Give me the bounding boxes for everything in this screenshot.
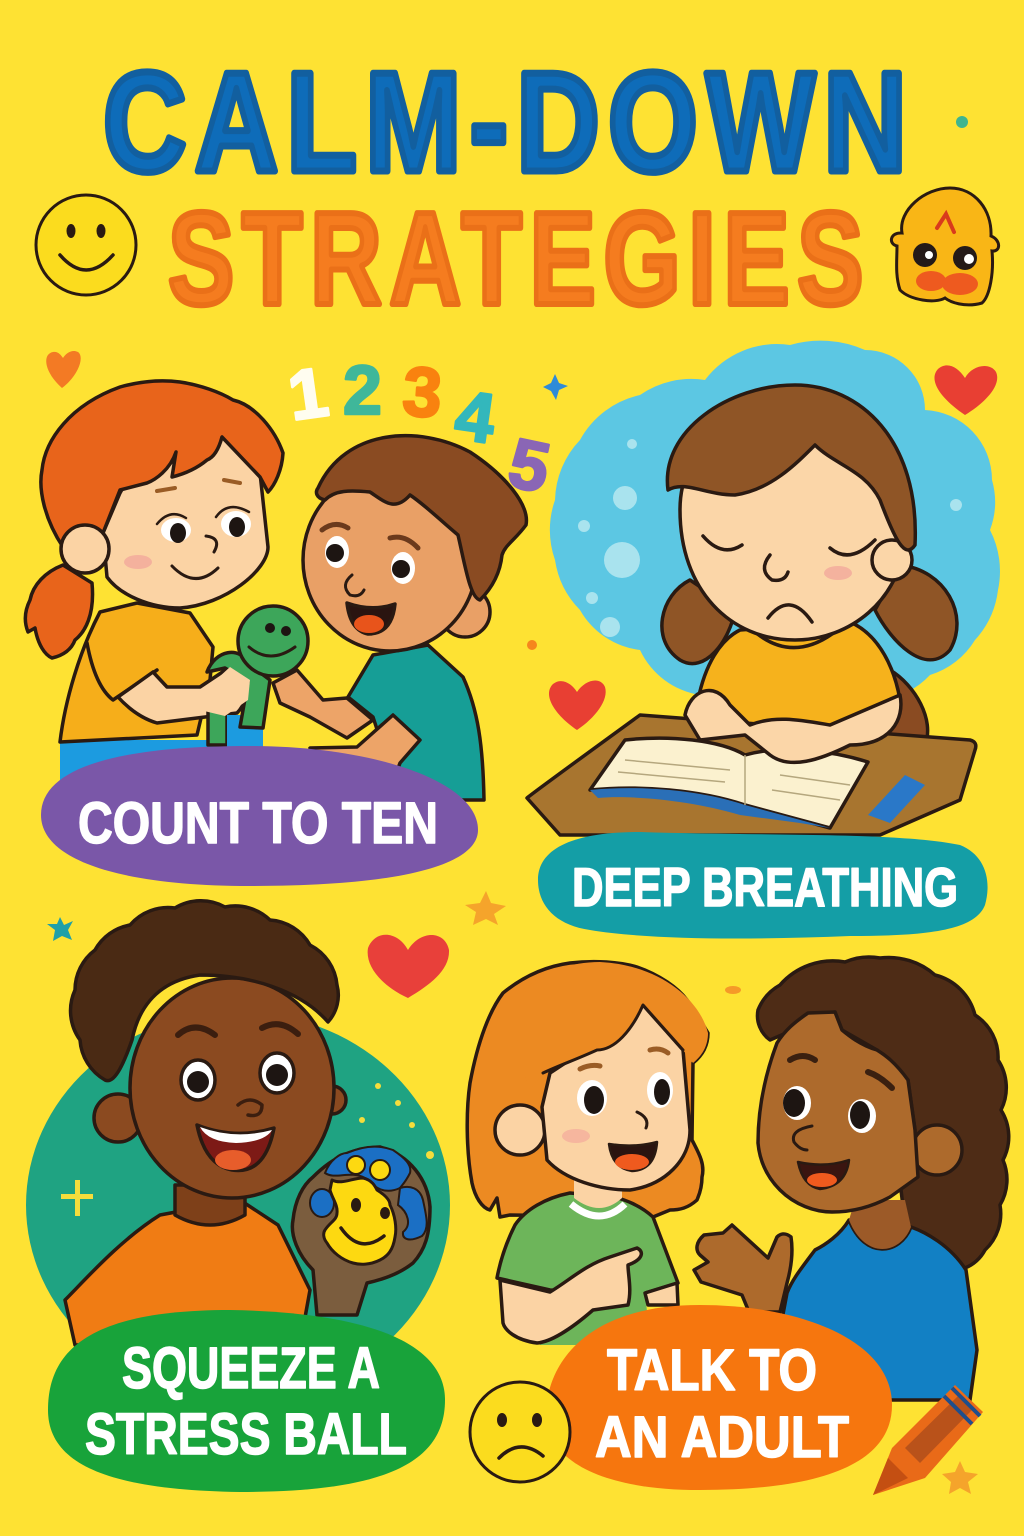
blue top [780, 1220, 977, 1400]
icon: heart middle [549, 681, 606, 730]
nose [637, 1112, 647, 1128]
icon: small orange star [942, 1461, 978, 1494]
icon: heart top right [934, 365, 997, 415]
shirt [65, 1200, 310, 1345]
right pigtail [875, 565, 957, 660]
shirt [60, 603, 213, 742]
eyelids [157, 507, 249, 524]
ear [912, 1125, 962, 1175]
green backdrop [26, 1012, 450, 1398]
head [303, 469, 477, 651]
open book [590, 738, 868, 828]
boy character [65, 901, 346, 1345]
icon: orange dash [725, 986, 741, 994]
eyes [577, 1080, 607, 1116]
number 4: 4 [450, 376, 500, 458]
label pill: talk to an adult [546, 1305, 892, 1490]
cheek [124, 555, 152, 569]
icon: blue sparkle [543, 374, 568, 400]
nose [345, 575, 364, 596]
label text line 2: AN ADULT [595, 1405, 849, 1470]
icon: heart top left [46, 351, 81, 388]
stress ball in hand [292, 1147, 430, 1315]
eyes [325, 536, 349, 568]
panel: squeeze a stress ball [26, 901, 450, 1492]
number 2: 2 [343, 351, 382, 429]
nose and smile [172, 536, 218, 579]
panel: deep breathing [527, 341, 1000, 938]
icon: sad face [470, 1382, 570, 1482]
nose [238, 1100, 262, 1116]
brows [157, 480, 240, 491]
ear [440, 587, 490, 637]
toy blue pants patch [227, 715, 263, 748]
cheek [562, 1129, 590, 1143]
collar [571, 1204, 625, 1216]
desk [527, 715, 976, 835]
brows [322, 524, 418, 548]
panel: talk to an adult [467, 957, 1009, 1490]
fringe [517, 962, 708, 1090]
icon: orange star [465, 891, 506, 925]
lower shirt [540, 1290, 650, 1345]
toy hand overlap [200, 667, 250, 716]
neck [175, 1185, 245, 1225]
head [680, 420, 905, 640]
panel: count to ten [25, 381, 526, 886]
hair [41, 381, 283, 547]
girl character [662, 385, 957, 745]
green smiley toy [200, 606, 308, 748]
left pigtail [662, 580, 735, 664]
cheek [824, 566, 852, 580]
icon: teal star [47, 917, 73, 941]
curly hair [757, 957, 1009, 1268]
title [103, 43, 915, 332]
ear [61, 525, 109, 573]
head [542, 1005, 690, 1190]
nose [793, 1126, 812, 1150]
head [130, 978, 334, 1198]
shirt [698, 622, 900, 745]
ear [872, 540, 912, 580]
closed eyes [703, 536, 875, 555]
back hair [467, 962, 708, 1217]
curly hair [71, 901, 338, 1081]
adult character [694, 957, 1009, 1400]
boy character [273, 436, 526, 800]
blue breath cloud [550, 341, 1000, 700]
shirt [497, 1193, 678, 1293]
numbers one to five [283, 351, 556, 508]
chair [880, 670, 928, 745]
decorative dot [956, 116, 968, 128]
label pill: deep breathing [538, 832, 988, 938]
icon: crayon [873, 1385, 983, 1495]
hands [685, 691, 901, 762]
arm [118, 667, 250, 723]
ears [94, 1094, 142, 1142]
toy head [238, 606, 308, 676]
face [351, 1198, 361, 1212]
sleeve line [87, 643, 157, 700]
shirt [348, 645, 484, 800]
nose and frown [764, 555, 812, 622]
mouth [197, 1125, 274, 1170]
number 3: 3 [400, 352, 444, 432]
pants [60, 740, 262, 780]
blue pencil case [868, 775, 925, 823]
icon: smiley face [36, 195, 136, 295]
mouth [347, 603, 395, 634]
ball face [324, 1178, 396, 1264]
girl character [25, 381, 283, 780]
fringe edge [543, 1005, 683, 1073]
eyes [783, 1086, 811, 1120]
mouth [798, 1160, 849, 1189]
hand [694, 1225, 792, 1312]
brows [580, 1049, 668, 1069]
head [103, 437, 268, 608]
label text: COUNT TO TEN [78, 791, 438, 856]
toy left leg [208, 700, 227, 745]
yellow blobs [347, 1156, 365, 1174]
neck collar [755, 628, 840, 648]
icon: big red heart [368, 935, 449, 998]
mouth [609, 1142, 657, 1171]
icon: small orange dot [527, 640, 537, 650]
neck [849, 1200, 911, 1249]
ear [495, 1105, 545, 1155]
eyes [161, 518, 191, 542]
far sleeve arm [645, 1283, 678, 1305]
eyes [181, 1060, 215, 1100]
label text line 1: SQUEEZE A [122, 1336, 380, 1401]
neck [574, 1180, 622, 1208]
arm and pointing hand [500, 1248, 641, 1343]
brows [178, 1024, 298, 1035]
bubbles [578, 439, 962, 637]
head [758, 1012, 918, 1212]
toy stem [207, 652, 270, 728]
sparkles [61, 1083, 434, 1216]
hair [667, 385, 915, 550]
icon: funny yellow face [891, 188, 999, 305]
number 1: 1 [283, 352, 333, 435]
label pill: squeeze a stress ball [48, 1310, 445, 1492]
brows [790, 1056, 892, 1088]
label pill: count to ten [41, 746, 478, 886]
arm and hand [292, 1147, 430, 1315]
blue blobs [310, 1147, 427, 1239]
girl character [467, 962, 708, 1345]
number 5: 5 [502, 423, 556, 508]
pigtail [25, 565, 93, 658]
far arm [273, 670, 373, 738]
near arm [310, 715, 420, 790]
label text line 1: TALK TO [607, 1338, 817, 1403]
hair [316, 436, 526, 600]
label text line 2: STRESS BALL [85, 1402, 407, 1467]
